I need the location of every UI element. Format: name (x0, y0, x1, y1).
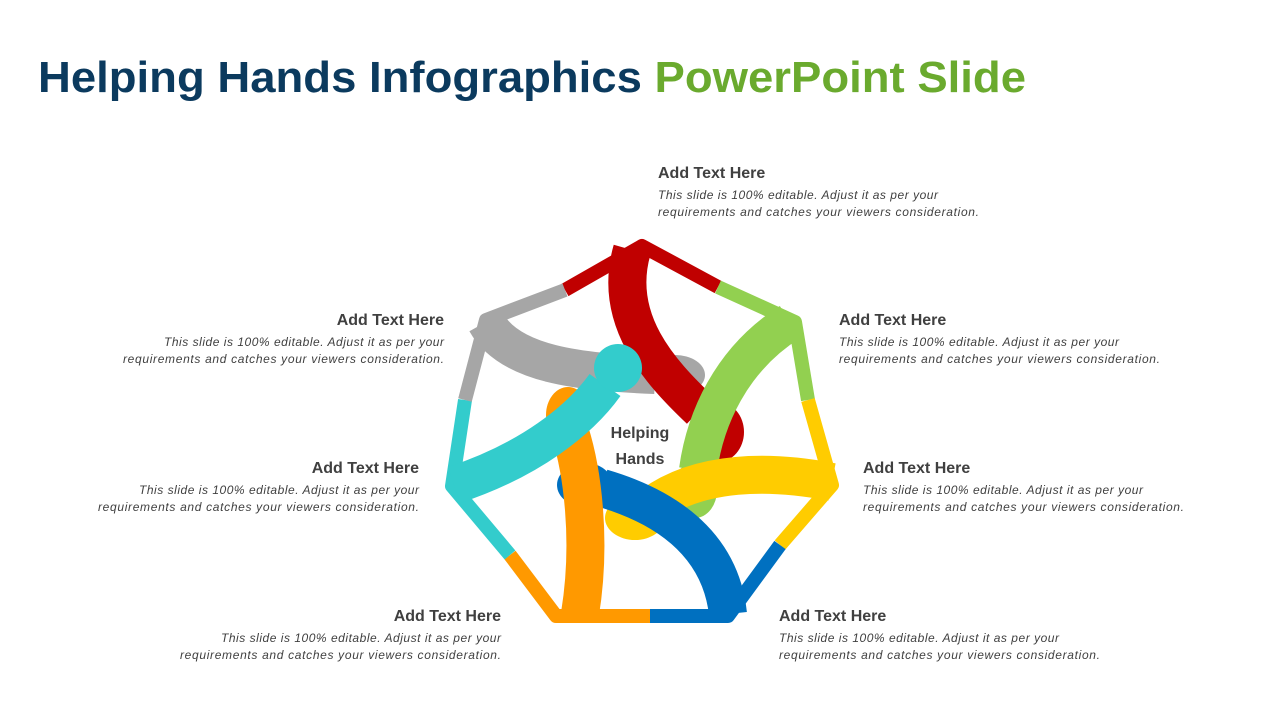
text block: left 3: Add Text Here (394, 608, 501, 625)
text block: left 3 (180, 608, 502, 662)
arm: gray (486, 322, 705, 395)
text block: top (658, 165, 979, 219)
arm: cyan (454, 344, 642, 485)
center label: Helping (611, 425, 669, 442)
text block: left 2: requirements and catches your viewers consideration. (98, 500, 419, 514)
text block: top: This slide is 100% editable. Adjust it as per your (658, 188, 939, 202)
text block: top: Add Text Here (658, 165, 765, 182)
text block: left 1: requirements and catches your viewers consideration. (123, 352, 444, 366)
text block: right 3: Add Text Here (779, 608, 886, 625)
text block: right 2 (863, 460, 1184, 514)
text block: top: requirements and catches your viewers consideration. (658, 205, 979, 219)
text block: right 3 (779, 608, 1100, 662)
text block: left 2 (98, 460, 420, 514)
diagram: helping hands heptagon (452, 246, 832, 616)
text block: right 1: Add Text Here (839, 312, 946, 329)
arm: blue (557, 463, 728, 614)
text block: right 2: This slide is 100% editable. Adjust it as per your (863, 483, 1144, 497)
text block: right 3: This slide is 100% editable. Adjust it as per your (779, 631, 1060, 645)
arm: red (627, 250, 744, 462)
text block: right 1 (839, 312, 1160, 366)
arm: green (673, 322, 790, 518)
text block: left 1: Add Text Here (337, 312, 444, 329)
text block: left 2: Add Text Here (312, 460, 419, 477)
text block: right 3: requirements and catches your viewers consideration. (779, 648, 1100, 662)
text block: left 3: requirements and catches your viewers consideration. (180, 648, 501, 662)
text block: left 1: This slide is 100% editable. Adjust it as per your (164, 335, 445, 349)
arm: orange (546, 387, 590, 614)
text block: right 1: requirements and catches your viewers consideration. (839, 352, 1160, 366)
center label (611, 425, 669, 468)
arm: yellow (605, 475, 832, 540)
text block: left 1 (123, 312, 445, 366)
heptagon frame (452, 246, 832, 616)
text block: right 2: Add Text Here (863, 460, 970, 477)
text block: right 1: This slide is 100% editable. Adjust it as per your (839, 335, 1120, 349)
text block: left 3: This slide is 100% editable. Adjust it as per your (221, 631, 502, 645)
text block: left 2: This slide is 100% editable. Adjust it as per your (139, 483, 420, 497)
center label: Hands (616, 451, 665, 468)
title: Helping Hands Infographics PowerPoint Slide (38, 53, 1026, 102)
text block: right 2: requirements and catches your viewers consideration. (863, 500, 1184, 514)
